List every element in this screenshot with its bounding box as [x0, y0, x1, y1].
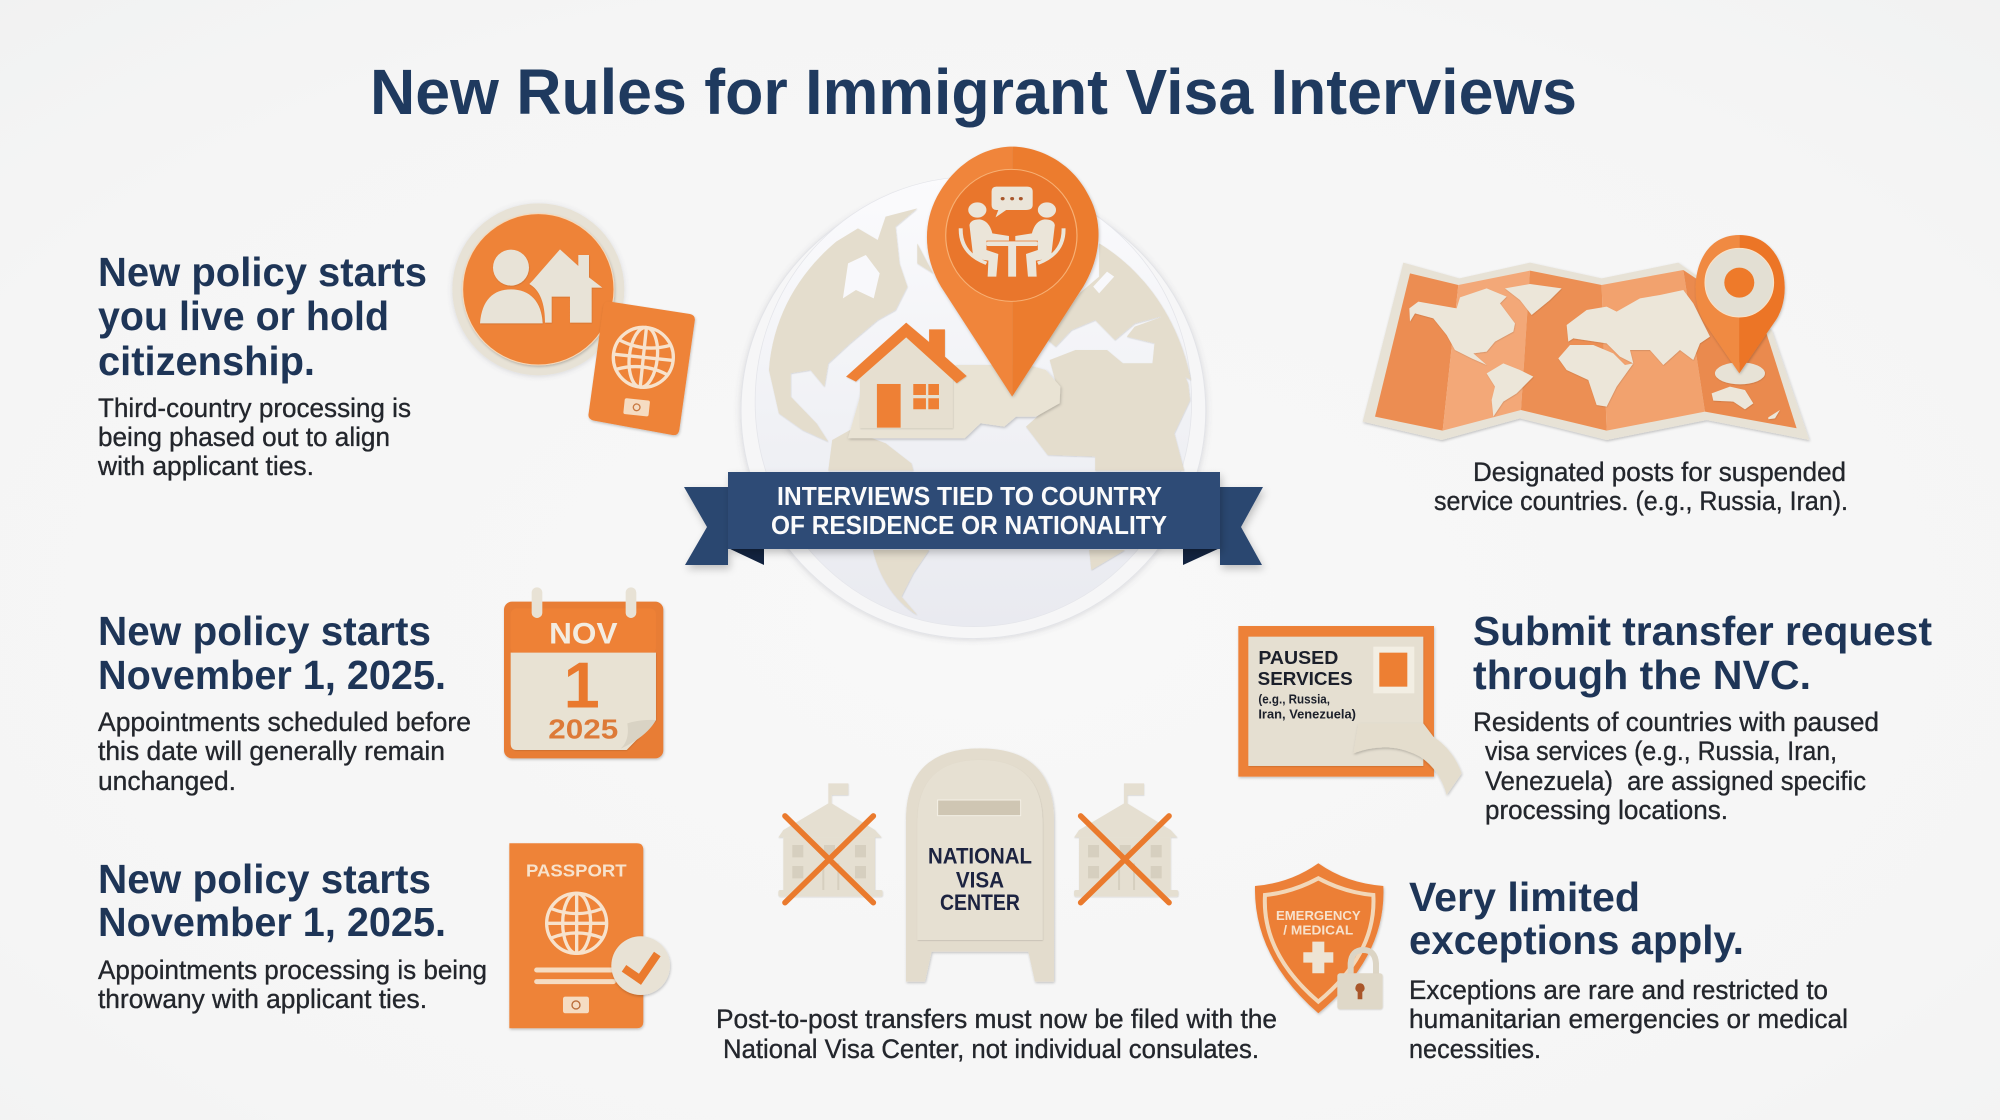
text: exceptions are rare: Exceptions are rare and restricted to [1409, 975, 1828, 1005]
heading: new policy starts you live or hold citizenship [98, 249, 427, 384]
heading: very limited exceptions apply: exceptions apply. [1409, 917, 1744, 963]
icon: crossed-out consulate right [1074, 783, 1178, 903]
text: post-to-post transfers must be filed with nvc: Post-to-post transfers must now be filed with the [716, 1004, 1277, 1034]
text: post-to-post transfers must be filed with nvc [716, 1004, 1277, 1064]
icon: folded world map with pin [1363, 235, 1809, 440]
text: appointments scheduled before this date: Appointments scheduled before [98, 707, 471, 737]
panel: post-to-post transfers [716, 748, 1277, 1064]
text: appointments scheduled before this date: this date will generally remain [98, 736, 445, 766]
heading: new policy starts november 1 2025 repeated [98, 856, 446, 945]
icon: emergency medical shield with lock: / MEDICAL [1283, 922, 1353, 937]
text: residents of countries with paused visa services: visa services (e.g., Russia, Iran, [1485, 736, 1837, 766]
icon: crossed-out consulate left [778, 783, 883, 903]
panel: left column block 3 [98, 843, 670, 1028]
text: appointments scheduled before this date [98, 707, 471, 796]
map pin [1695, 235, 1785, 373]
heading: very limited exceptions apply: Very limited [1409, 874, 1640, 920]
icon: national visa center mailbox: VISA [956, 867, 1004, 892]
heading: submit transfer request through the nvc [1473, 608, 1932, 698]
icon: national visa center mailbox: CENTER [940, 890, 1020, 915]
icon: envelope paused services: SERVICES [1258, 668, 1353, 689]
icon: calendar nov 1 2025: NOV [549, 617, 618, 650]
heading: new policy starts you live or hold citizenship: citizenship. [98, 338, 315, 384]
panel: left column block 2 [98, 587, 663, 796]
text: appointments processing: throwany with applicant ties. [98, 984, 427, 1014]
panel: designated posts [1363, 235, 1848, 516]
icon: national visa center mailbox: NATIONAL [928, 843, 1032, 868]
heading: new policy starts november 1 2025 [98, 608, 446, 698]
text: residents of countries with paused visa services [1473, 707, 1879, 825]
icon: passport with check [509, 843, 670, 1028]
text: designated posts for suspended service countries: service countries. (e.g., Russia, Iran). [1434, 486, 1848, 516]
text: post-to-post transfers must be filed with nvc: National Visa Center, not individual consulates. [723, 1034, 1259, 1064]
panel: very limited exceptions [1255, 863, 1848, 1064]
icon: passport with check: PASSPORT [526, 861, 627, 881]
icon: national visa center mailbox [906, 748, 1054, 982]
text: appointments processing [98, 955, 487, 1014]
icon: envelope paused services: PAUSED [1258, 647, 1338, 668]
text: third-country processing: being phased out to align [98, 422, 390, 452]
text: appointments scheduled before this date: unchanged. [98, 766, 236, 796]
text: designated posts for suspended service countries: Designated posts for suspended [1473, 457, 1846, 487]
text: residents of countries with paused visa services: processing locations. [1485, 795, 1728, 825]
text: exceptions are rare: humanitarian emergencies or medical [1409, 1004, 1848, 1034]
text: exceptions are rare: necessities. [1409, 1034, 1541, 1064]
text: third-country processing [97, 393, 411, 481]
text: exceptions are rare [1409, 975, 1848, 1064]
icon: calendar nov 1 2025: 1 [564, 648, 600, 721]
heading: submit transfer request through the nvc: Submit transfer request [1473, 608, 1932, 654]
icon: emergency medical shield with lock: EMERGENCY [1276, 908, 1361, 923]
icon: calendar nov 1 2025 [504, 587, 663, 758]
heading: new policy starts november 1 2025 repeated: November 1, 2025. [98, 899, 446, 945]
panel: central globe hero [684, 147, 1263, 639]
banner: interviews tied to country: OF RESIDENCE OR NATIONALITY [771, 510, 1167, 540]
banner: interviews tied to country: INTERVIEWS TIED TO COUNTRY [777, 481, 1162, 511]
text: designated posts for suspended service countries [1434, 457, 1848, 516]
icon: orange map pin with interview [927, 147, 1099, 397]
heading: new policy starts november 1 2025 repeated: New policy starts [98, 856, 431, 902]
title: New Rules for Immigrant Visa Interviews [370, 56, 1577, 128]
icon: calendar nov 1 2025: 2025 [548, 713, 618, 744]
heading: new policy starts you live or hold citizenship: you live or hold [98, 293, 389, 339]
text: appointments processing: Appointments processing is being [98, 955, 487, 985]
icon: envelope paused services: (e.g., Russia, [1258, 692, 1330, 706]
text: residents of countries with paused visa services: Venezuela) are assigned specific [1485, 766, 1866, 796]
globe [741, 177, 1206, 639]
banner: interviews tied to country [684, 472, 1263, 565]
text: third-country processing: Third-country processing is [98, 393, 411, 423]
text: third-country processing: with applicant ties. [97, 451, 314, 481]
heading: new policy starts november 1 2025: November 1, 2025. [98, 652, 446, 698]
heading: submit transfer request through the nvc: through the NVC. [1473, 652, 1811, 698]
icon: person, home and passport [452, 203, 695, 435]
continents [769, 208, 1191, 615]
icon: house on globe [846, 323, 967, 428]
icon: envelope paused services: Iran, Venezuela) [1258, 707, 1356, 721]
panel: submit transfer request [1238, 608, 1932, 825]
heading: very limited exceptions apply [1409, 874, 1744, 963]
panel: left column block 1 [97, 203, 695, 481]
icon: emergency medical shield with lock [1255, 863, 1383, 1013]
interview people and table [961, 187, 1064, 277]
heading: new policy starts you live or hold citizenship: New policy starts [98, 249, 427, 295]
icon: envelope paused services [1238, 626, 1462, 795]
heading: new policy starts november 1 2025: New policy starts [98, 608, 431, 654]
text: residents of countries with paused visa services: Residents of countries with paused [1473, 707, 1879, 737]
